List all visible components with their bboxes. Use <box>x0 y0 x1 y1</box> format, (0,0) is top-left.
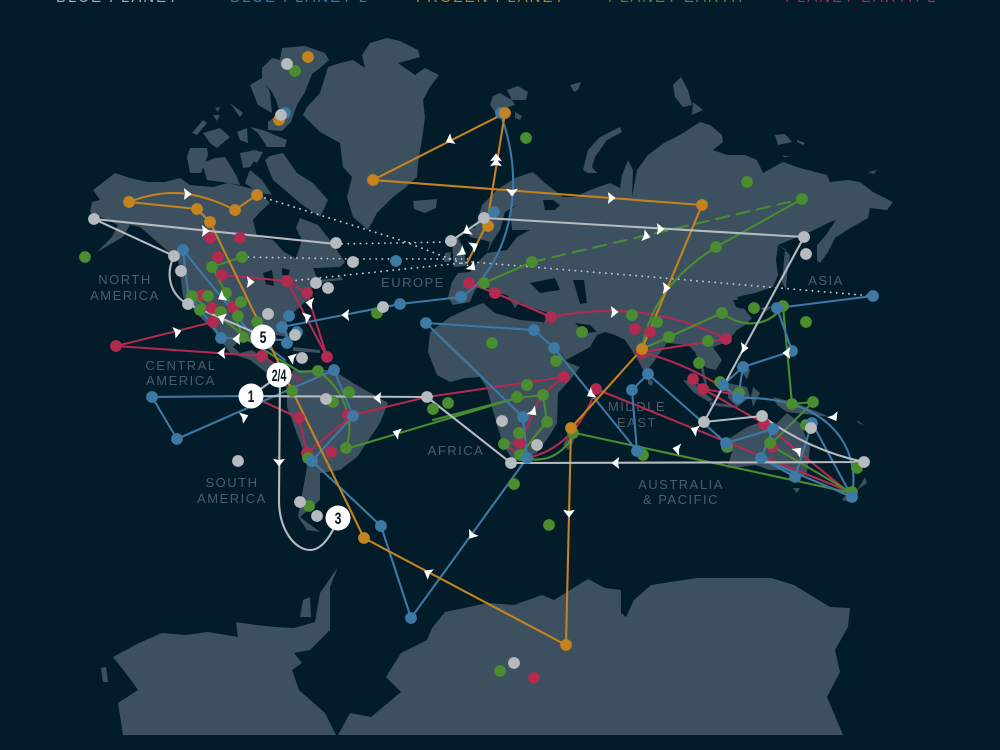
region labels: EUROPE <box>381 275 445 290</box>
location dots: grey <box>88 58 870 669</box>
land: Eurasia <box>448 122 893 392</box>
region labels: SOUTH <box>206 475 258 490</box>
region labels <box>90 272 844 507</box>
region labels: MIDDLE <box>608 399 666 414</box>
region labels: AMERICA <box>90 288 160 303</box>
route: Blue Planet (grey) <box>94 218 864 550</box>
region labels: AFRICA <box>428 443 484 458</box>
region labels: & PACIFIC <box>643 492 719 507</box>
land: Africa and Madagascar <box>428 303 580 460</box>
land: Arctic Russia islands <box>490 77 877 174</box>
route: Frozen Planet (orange) <box>129 113 702 645</box>
legend: series names <box>56 0 938 6</box>
badge 2/4: 2/4 <box>272 365 286 385</box>
numbered badges <box>238 324 350 530</box>
region labels: CENTRAL <box>145 358 217 373</box>
location dots: orange <box>123 51 708 651</box>
route: Planet Earth 2 (red) <box>116 275 852 495</box>
land: Australia and New Zealand <box>727 413 867 502</box>
land: Antarctica <box>101 567 850 735</box>
land: North and Central America <box>90 173 345 388</box>
land: Greenland and Ellesmere <box>250 38 439 230</box>
route: Blue Planet 2 (blue) <box>152 113 873 618</box>
dotted connector routes <box>242 198 873 296</box>
badge 1 <box>238 384 264 408</box>
region labels: EAST <box>617 415 657 430</box>
location dots: red <box>110 232 778 684</box>
inland seas and water cut-outs <box>263 200 836 333</box>
region labels: AMERICA <box>197 491 267 506</box>
region labels: AUSTRALIA <box>638 477 724 492</box>
region labels: NORTH <box>98 272 152 287</box>
badge 2/4 <box>266 362 292 388</box>
badge 3: 3 <box>335 510 341 529</box>
land: Canadian Arctic islands <box>187 103 437 217</box>
location dots: blue <box>146 107 879 624</box>
badge 5: 5 <box>260 329 266 348</box>
region labels: ASIA <box>808 273 844 288</box>
badge 3 <box>326 506 350 530</box>
location dots: green <box>79 65 863 677</box>
badge 5 <box>250 324 276 350</box>
world map landmasses <box>90 38 893 735</box>
land: Britain and Ireland <box>444 237 466 267</box>
land: Southeast Asia islands and Japan <box>648 250 830 417</box>
route: Planet Earth (green) <box>192 199 852 493</box>
region labels: AMERICA <box>146 373 216 388</box>
direction arrows <box>172 133 841 580</box>
badge 1: 1 <box>248 388 254 407</box>
land: South America <box>287 347 388 532</box>
